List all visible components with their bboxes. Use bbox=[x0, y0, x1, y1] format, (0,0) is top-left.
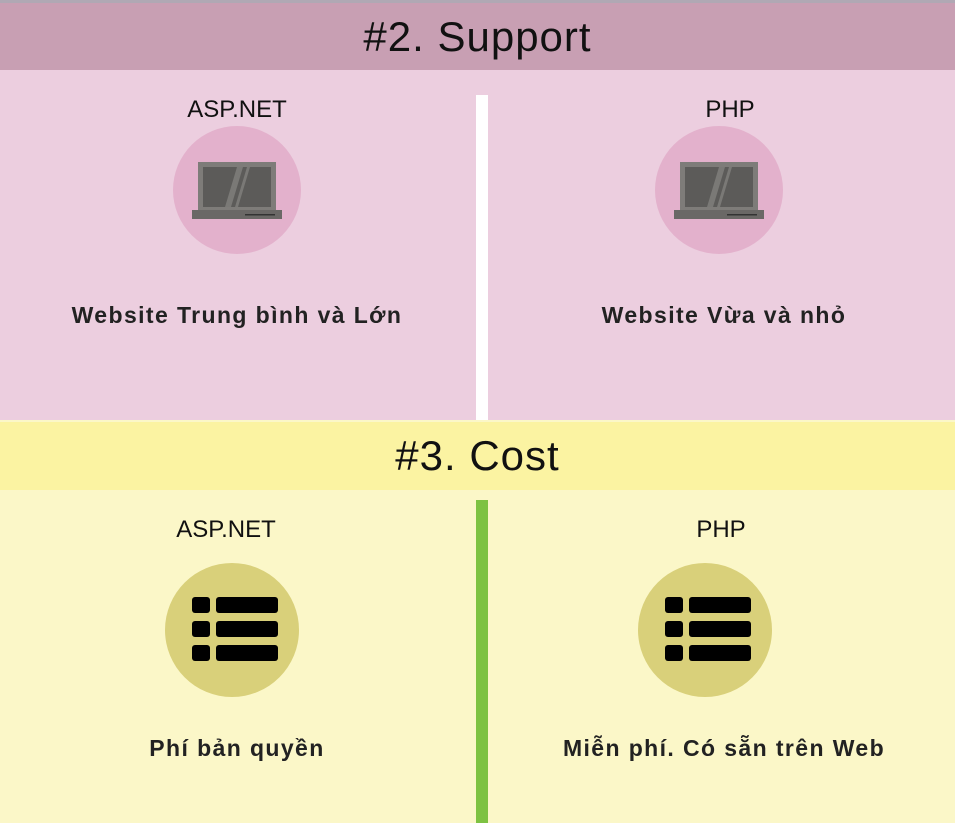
header: cost bbox=[0, 422, 955, 490]
divider bbox=[476, 95, 488, 420]
label php: PHP bbox=[705, 96, 755, 123]
icon: laptop php bbox=[655, 126, 783, 254]
divider bbox=[476, 500, 488, 823]
text asp: Phí bản quyền bbox=[149, 735, 325, 761]
header: cost: #3. Cost bbox=[395, 432, 560, 479]
label php: PHP bbox=[696, 516, 746, 543]
header: support bbox=[0, 3, 955, 70]
panel: support bbox=[0, 70, 955, 420]
panel: cost bbox=[149, 500, 885, 823]
text php: Miễn phí. Có sẵn trên Web bbox=[563, 735, 885, 761]
text asp: Website Trung bình và Lớn bbox=[72, 302, 402, 328]
icon: list asp bbox=[165, 563, 299, 697]
header: support: #2. Support bbox=[363, 13, 592, 60]
label asp: ASP.NET bbox=[176, 516, 276, 543]
icon: list php bbox=[638, 563, 772, 697]
text php: Website Vừa và nhỏ bbox=[602, 302, 846, 328]
icon: laptop asp bbox=[173, 126, 301, 254]
label asp: ASP.NET bbox=[187, 96, 287, 123]
